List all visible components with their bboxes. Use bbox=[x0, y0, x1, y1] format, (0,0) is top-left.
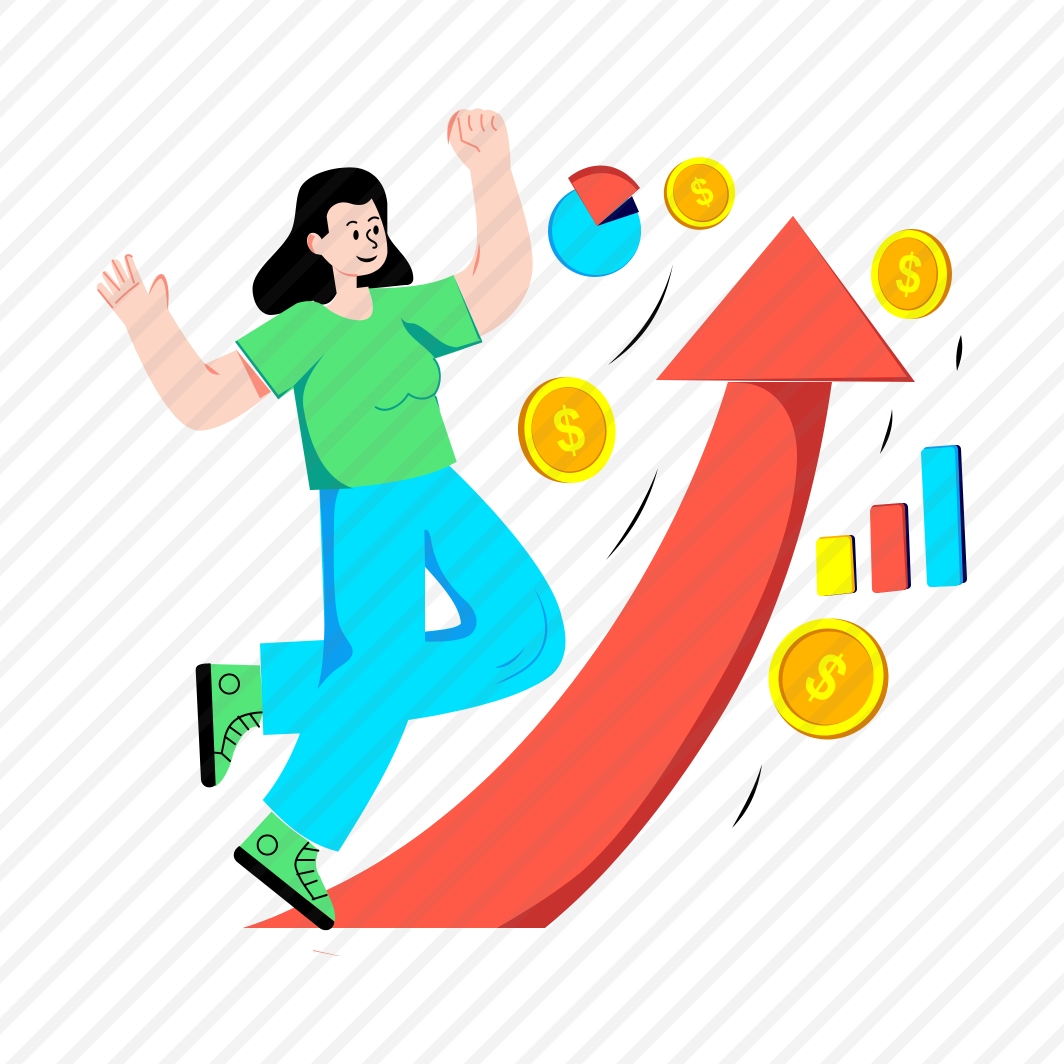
coin left: $ bbox=[547, 393, 591, 468]
motion swooshes bbox=[606, 264, 962, 828]
gap between legs bbox=[425, 567, 461, 632]
small stray line below arrow bbox=[313, 950, 340, 956]
coin top right: $ bbox=[892, 241, 926, 307]
coin lower right: $ bbox=[791, 637, 860, 718]
shirt shading bbox=[235, 275, 482, 490]
bar chart icon bbox=[820, 449, 963, 592]
arrow shaft shadow bbox=[243, 382, 832, 928]
right arm and raised fist bbox=[447, 108, 533, 337]
rear shoe bbox=[196, 663, 263, 787]
green t-shirt bbox=[235, 275, 482, 490]
cyan trousers bbox=[196, 460, 565, 930]
navy slice bbox=[597, 196, 639, 226]
front shoe bbox=[234, 812, 335, 930]
hand line details bbox=[98, 255, 271, 398]
coin lower right bbox=[747, 597, 911, 761]
coin top right bbox=[871, 229, 952, 319]
yellow bar bbox=[820, 539, 853, 592]
red bar bbox=[874, 507, 907, 589]
red slice bbox=[568, 166, 640, 226]
hair bbox=[253, 167, 413, 315]
facial features bbox=[347, 217, 379, 262]
coin top small bbox=[652, 146, 747, 241]
pie chart icon bbox=[548, 166, 641, 277]
coin left bbox=[513, 372, 621, 488]
coin top small: $ bbox=[684, 167, 720, 216]
arrow shaft highlight bbox=[243, 382, 797, 928]
fist line details bbox=[447, 110, 496, 277]
growth arrow bbox=[243, 216, 915, 928]
trouser shading bbox=[317, 480, 547, 689]
arrow head bbox=[656, 216, 915, 382]
woman figure bbox=[97, 108, 565, 930]
ear detail bbox=[308, 234, 316, 254]
chin shadow bbox=[333, 265, 357, 277]
neck and face bbox=[307, 198, 387, 327]
cyan bar bbox=[925, 449, 963, 583]
left arm and open hand bbox=[97, 255, 272, 431]
